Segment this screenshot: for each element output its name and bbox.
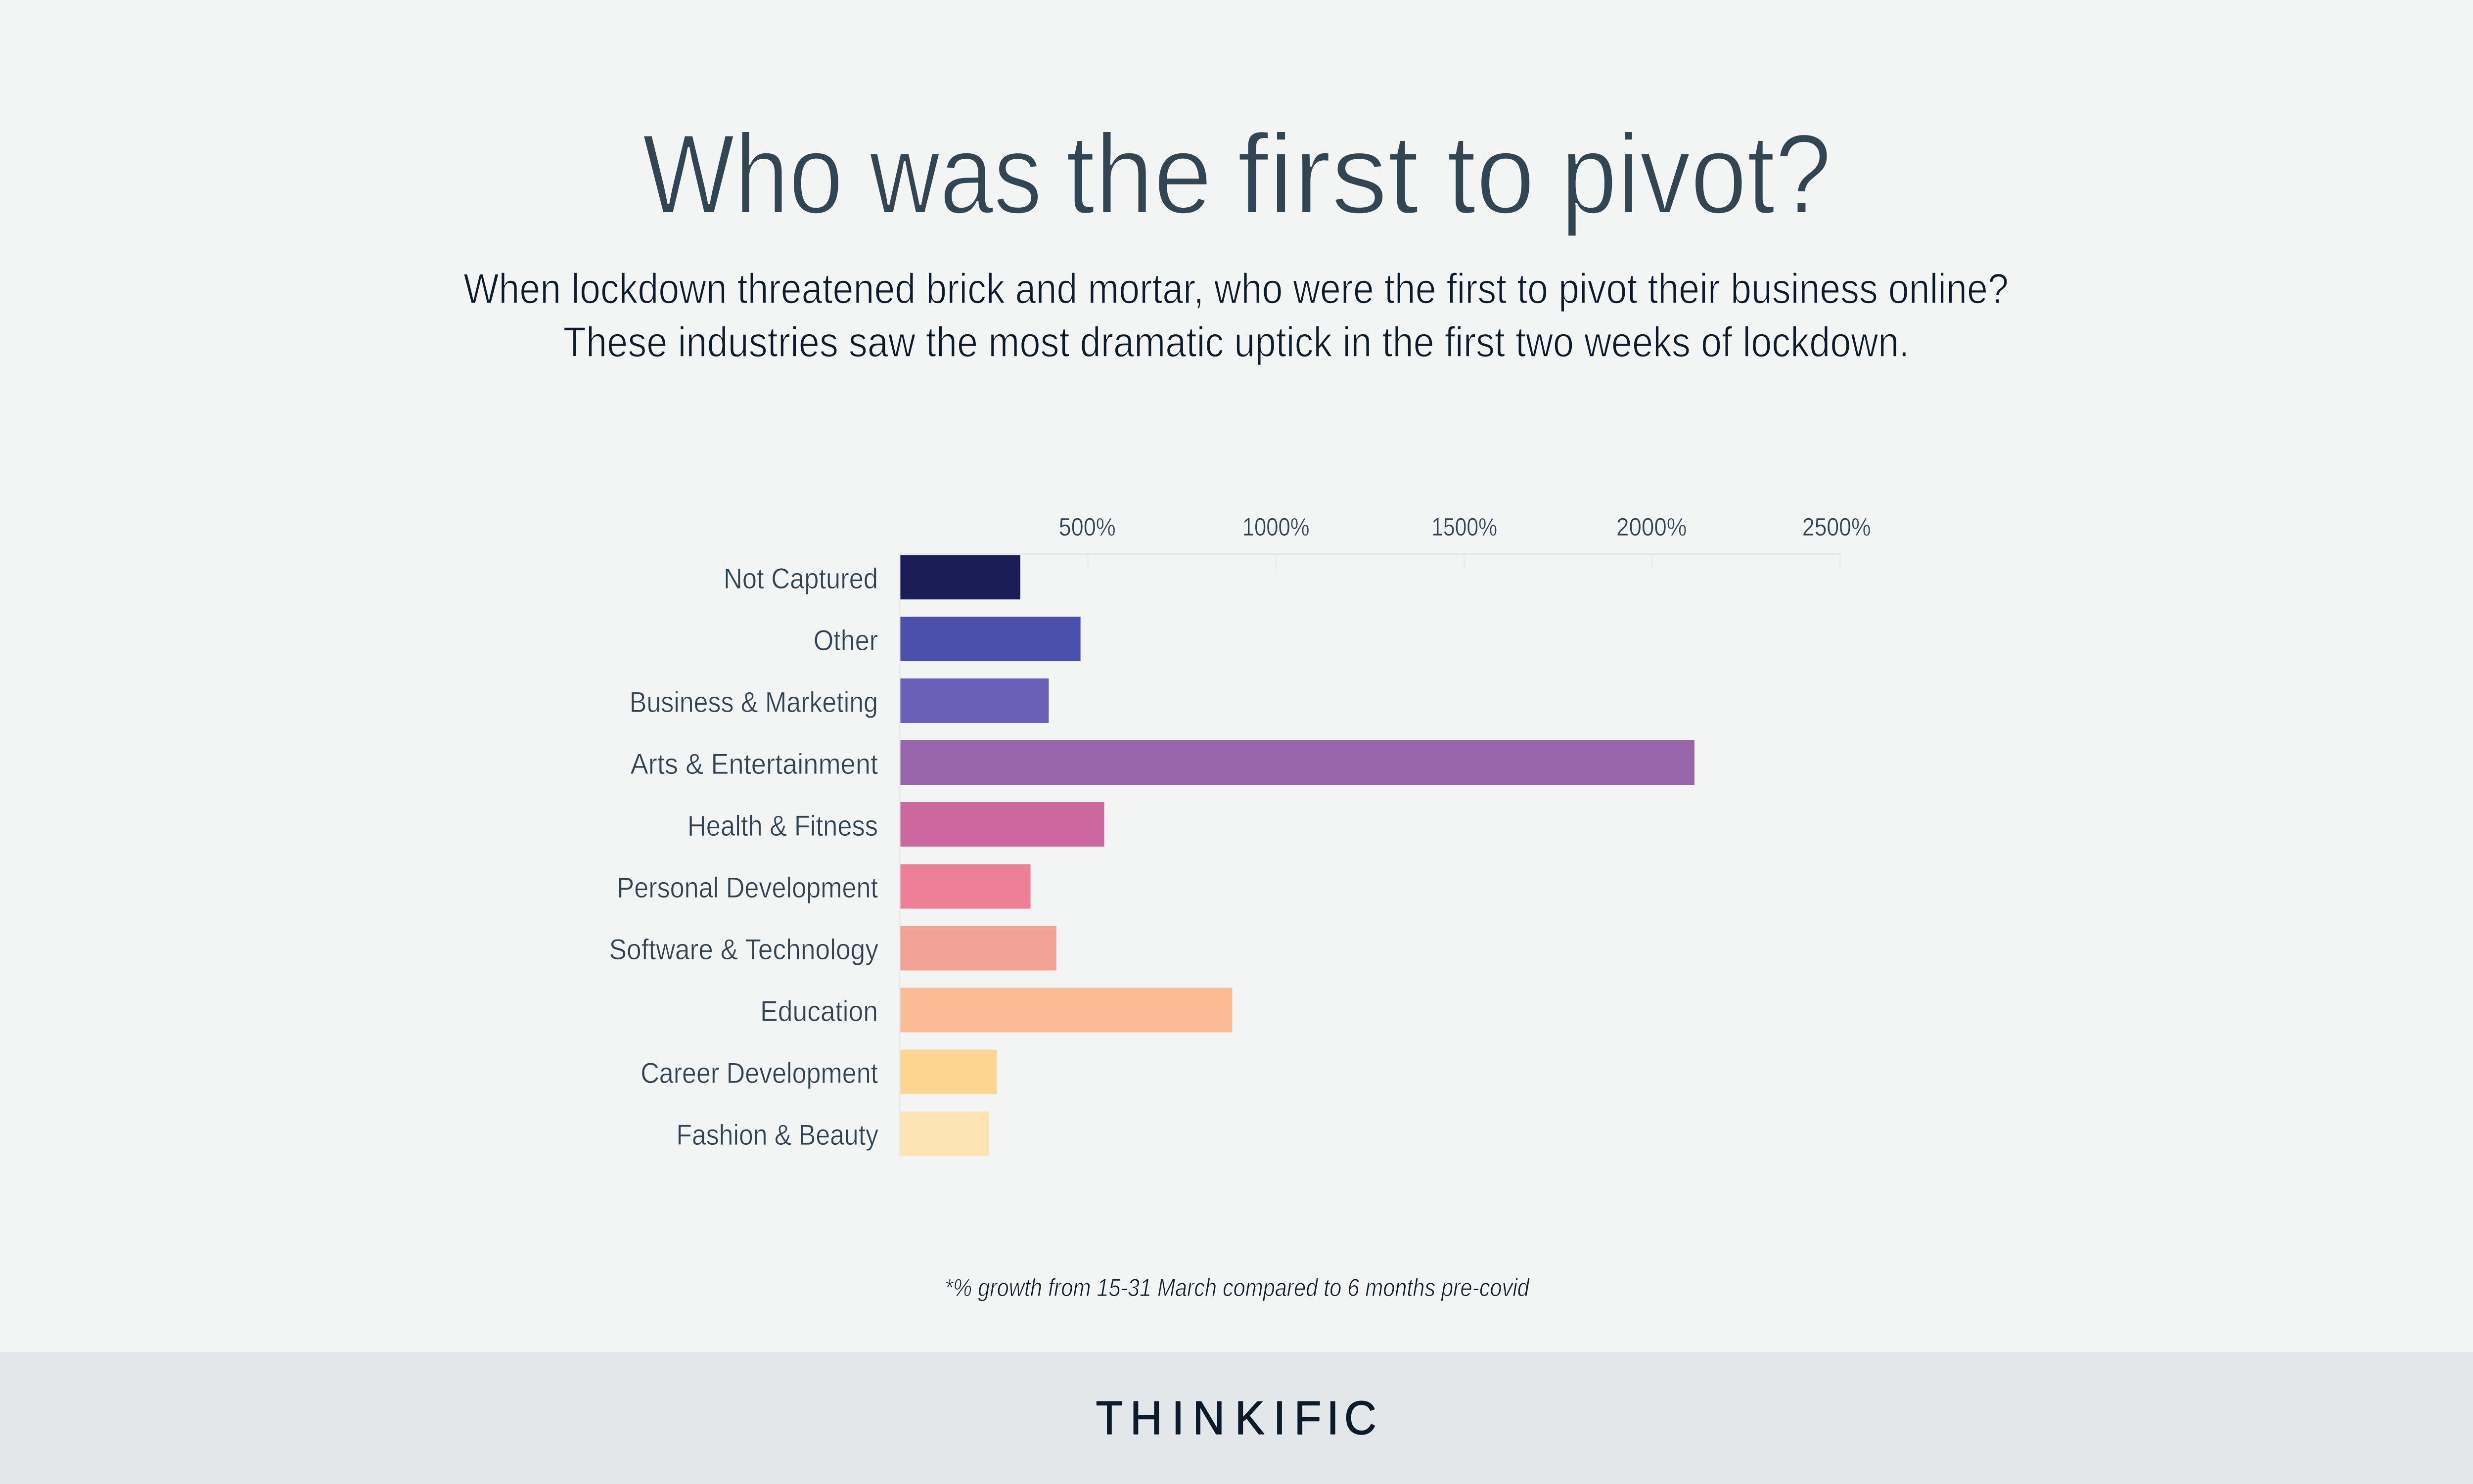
title: to <box>1447 111 1535 238</box>
x axis labels: 1500% <box>1431 513 1497 541</box>
category labels: Business & Marketing <box>630 686 878 718</box>
category labels: Software & Technology <box>609 933 878 965</box>
category labels: Career Development <box>641 1057 878 1089</box>
x axis labels: 2000% <box>1616 513 1687 541</box>
title: the <box>1066 111 1212 238</box>
title: first <box>1237 111 1419 238</box>
subtitle: When lockdown threatened brick and mortar, who were the first to pivot their business online? <box>463 266 2009 313</box>
category labels: Education <box>760 995 878 1027</box>
logo: Thinkific: THINKIFIC <box>1096 1391 1376 1444</box>
category labels: Personal Development <box>617 871 878 903</box>
category labels: Not Captured <box>724 562 878 594</box>
category labels: Arts & Entertainment <box>631 748 878 780</box>
category labels: Fashion & Beauty <box>676 1119 878 1151</box>
x axis line and ticks <box>899 553 1841 1156</box>
title: pivot? <box>1561 111 1832 238</box>
bars <box>900 555 1694 1156</box>
x axis labels: 500% <box>1059 513 1116 541</box>
subtitle <box>463 266 2009 366</box>
category labels <box>609 562 878 1151</box>
category labels: Health & Fitness <box>687 809 878 842</box>
bar chart <box>609 513 1871 1156</box>
title: Who <box>642 111 843 238</box>
x axis labels: 1000% <box>1242 513 1310 541</box>
subtitle: These industries saw the most dramatic uptick in the first two weeks of lockdown. <box>563 319 1909 366</box>
x axis labels <box>1059 513 1871 541</box>
x axis labels: 2500% <box>1802 513 1871 541</box>
footnote: *% growth from 15-31 March compared to 6 months pre-covid <box>945 1274 1530 1302</box>
category labels: Other <box>814 624 878 656</box>
footer band <box>0 1352 2473 1484</box>
title: was <box>869 111 1042 238</box>
